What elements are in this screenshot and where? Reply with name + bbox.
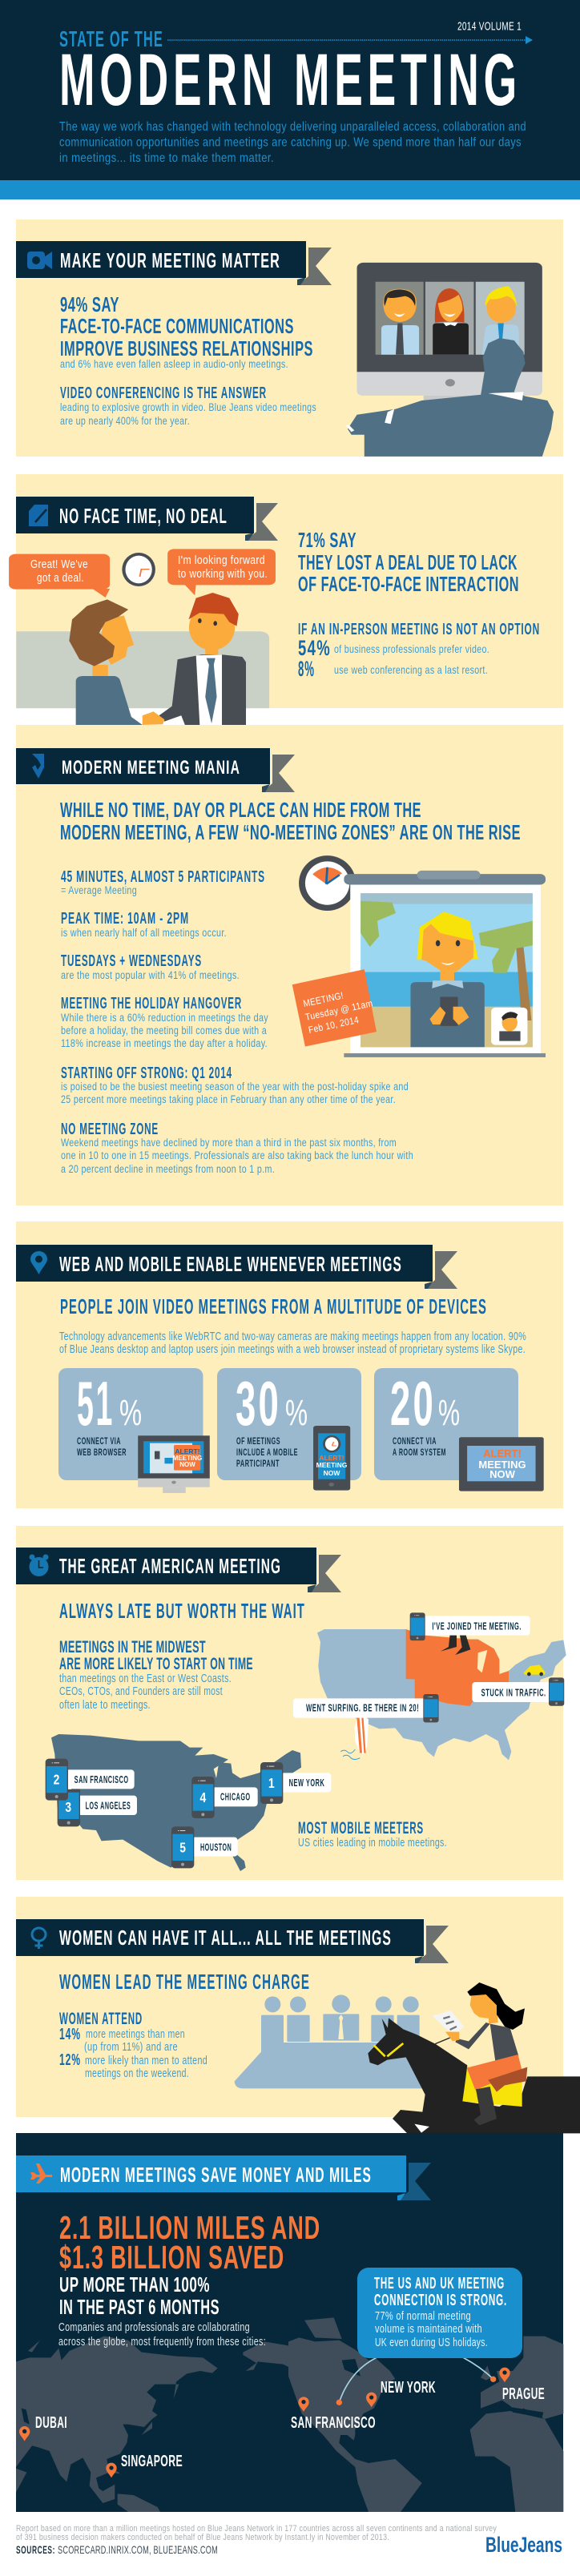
section banner bbox=[16, 1245, 457, 1289]
item: tuesdays and wednesdays: TUESDAYS + WEDNESDAYS bbox=[61, 952, 202, 970]
item: holiday hangover bbox=[61, 995, 268, 1049]
section banner bbox=[16, 497, 278, 541]
subheading bbox=[59, 1638, 253, 1673]
body text: are up nearly 400% for the year. bbox=[60, 414, 190, 427]
body text: CEOs, CTOs, and Founders are still most bbox=[59, 1684, 223, 1698]
item: tuesdays and wednesdays bbox=[61, 952, 240, 981]
headline figures: 2.1 BILLION MILES AND bbox=[59, 2209, 320, 2246]
item: no meeting zone: a 20 percent decline in meetings from noon to 1 p.m. bbox=[61, 1163, 275, 1175]
item: average meeting: 45 MINUTES, ALMOST 5 PARTICIPANTS bbox=[61, 868, 265, 886]
subheading bbox=[59, 2272, 220, 2319]
kicker: STATE OF THE bbox=[59, 26, 163, 51]
city: los angeles: 3 bbox=[65, 1801, 71, 1815]
section banner bbox=[16, 1548, 341, 1592]
stat: 14 percent: more meetings than men bbox=[86, 2028, 185, 2041]
panel: modern meeting mania bbox=[16, 725, 563, 1205]
sticky note text: Feb 10, 2014 bbox=[308, 1014, 360, 1036]
speech bubble text: man: to working with you. bbox=[178, 568, 268, 581]
panel: women bbox=[16, 1897, 580, 2133]
city labels: PRAGUE bbox=[502, 2385, 545, 2403]
callout: surfing bbox=[293, 1694, 439, 1722]
sources: SCORECARD.INRIX.COM, BLUEJEANS.COM bbox=[58, 2543, 218, 2556]
card: 30 percent: PARTICIPANT bbox=[236, 1458, 280, 1469]
heading: WOMEN LEAD THE MEETING CHARGE bbox=[59, 1970, 310, 1994]
item: average meeting bbox=[61, 868, 265, 896]
callout: traffic bbox=[472, 1677, 564, 1706]
most mobile meeters: MOST MOBILE MEETERS bbox=[298, 1819, 424, 1837]
item: average meeting: = Average Meeting bbox=[61, 884, 137, 896]
item: no meeting zone: one in 10 to one in 15 meetings. Professionals are also taking back the lunch hour with bbox=[61, 1149, 413, 1161]
card: 51 percent: % bbox=[119, 1392, 143, 1433]
icon: room system display: NOW bbox=[489, 1468, 516, 1480]
body text: Companies and professionals are collaborating bbox=[58, 2320, 250, 2334]
intro text bbox=[59, 1330, 526, 1356]
heading: ALWAYS LATE BUT WORTH THE WAIT bbox=[59, 1599, 305, 1623]
section banner bbox=[16, 241, 332, 285]
sticky note text: MEETING! bbox=[302, 990, 344, 1009]
icon: mobile phone: ALERT! bbox=[319, 1454, 344, 1462]
subheading: WOMEN ATTEND bbox=[59, 2010, 143, 2028]
speech bubble text: man: I'm looking forward bbox=[178, 554, 265, 567]
map: most mobile cities bbox=[46, 1734, 331, 1871]
subheading: IN THE PAST 6 MONTHS bbox=[59, 2295, 220, 2319]
icon: signed document bbox=[29, 505, 48, 526]
card: 51 percent bbox=[58, 1368, 203, 1480]
stat: 12 percent bbox=[59, 2051, 207, 2080]
speech bubble text: woman: got a deal. bbox=[37, 572, 84, 585]
panel: the great american meeting bbox=[16, 1526, 566, 1880]
city: chicago bbox=[191, 1777, 258, 1818]
icon: room system display: MEETING bbox=[478, 1459, 526, 1471]
headline figures: $1.3 BILLION SAVED bbox=[59, 2239, 284, 2276]
item: holiday hangover: before a holiday, the meeting bill comes due with a bbox=[61, 1024, 267, 1036]
panel: make your meeting matter bbox=[16, 219, 563, 457]
stat: 8 percent bbox=[298, 657, 488, 681]
intro text: in meetings... its time to make them matter. bbox=[59, 151, 274, 165]
item: holiday hangover: While there is a 60% reduction in meetings the day bbox=[61, 1012, 268, 1024]
panel: no face time, no deal bbox=[9, 474, 563, 725]
callout: us and uk bbox=[357, 2268, 522, 2358]
key stat: IMPROVE BUSINESS RELATIONSHIPS bbox=[60, 336, 313, 360]
illustration: video call on monitor bbox=[346, 263, 554, 457]
item: no meeting zone: Weekend meetings have declined by more than a third in the past six months, from bbox=[61, 1137, 397, 1149]
city: los angeles: LOS ANGELES bbox=[86, 1800, 131, 1811]
panel: save money and miles bbox=[16, 2133, 563, 2512]
body text bbox=[59, 1672, 232, 1712]
city: san francisco: SAN FRANCISCO bbox=[75, 1774, 129, 1785]
stat: 54 percent: of business professionals prefer video. bbox=[334, 642, 489, 655]
connection arcs bbox=[298, 2357, 510, 2412]
pins: asia bbox=[19, 2426, 117, 2477]
item: holiday hangover: MEETING THE HOLIDAY HANGOVER bbox=[61, 995, 242, 1012]
illustration: clock and projection screen bbox=[292, 855, 546, 1057]
stat: 12 percent: meetings on the weekend. bbox=[85, 2067, 189, 2080]
sticky note text: Tuesday @ 11am bbox=[304, 997, 374, 1023]
stat: 14 percent: 14% bbox=[59, 2026, 81, 2043]
city: new york: NEW YORK bbox=[289, 1777, 324, 1789]
key stat: 71% SAY bbox=[298, 528, 356, 552]
stat: 14 percent: (up from 11%) and are bbox=[84, 2041, 178, 2054]
card: 30 percent: % bbox=[285, 1392, 308, 1433]
callout: us and uk: volume is maintained with bbox=[375, 2322, 482, 2336]
illustration: meeting table and rider on horse bbox=[235, 1982, 580, 2133]
edition label: 2014 VOLUME 1 bbox=[457, 19, 522, 34]
icon: airplane bbox=[30, 2163, 52, 2184]
card: 20 percent: A ROOM SYSTEM bbox=[393, 1447, 446, 1458]
speech bubble text: woman bbox=[30, 558, 88, 585]
map: world, asia side bbox=[16, 2337, 296, 2512]
speech bubble text: woman: Great! We've bbox=[30, 558, 88, 571]
sources bbox=[16, 2543, 218, 2556]
body text: often late to meetings. bbox=[59, 1698, 151, 1712]
stat: 12 percent: more likely than men to attend bbox=[85, 2055, 207, 2067]
item: tuesdays and wednesdays: are the most popular with 41% of meetings. bbox=[61, 969, 240, 981]
subheading: MEETINGS IN THE MIDWEST bbox=[59, 1638, 206, 1656]
stat: 12 percent: 12% bbox=[59, 2051, 81, 2069]
card: 30 percent bbox=[217, 1368, 361, 1480]
stat note: and 6% have even fallen asleep in audio-only meetings. bbox=[60, 357, 288, 370]
card: 20 percent: % bbox=[438, 1392, 461, 1433]
illustration: handshake scene bbox=[9, 549, 276, 725]
key stat: FACE-TO-FACE COMMUNICATIONS bbox=[60, 314, 294, 338]
map: world, americas and europe side bbox=[288, 2317, 563, 2512]
card: 30 percent: 30 bbox=[236, 1368, 281, 1439]
body text: than meetings on the East or West Coasts. bbox=[59, 1672, 232, 1685]
item: starting off strong: is poised to be the busiest meeting season of the year with the post-holiday spike and bbox=[61, 1081, 409, 1093]
intro text bbox=[59, 120, 526, 165]
banner title: MODERN MEETINGS SAVE MONEY AND MILES bbox=[60, 2163, 372, 2187]
card: 51 percent: CONNECT VIA bbox=[77, 1435, 121, 1447]
icon: video camera bbox=[27, 252, 52, 269]
city labels bbox=[35, 2379, 545, 2470]
card: 51 percent: 51 bbox=[77, 1368, 115, 1439]
city: san francisco bbox=[46, 1759, 135, 1801]
icon: desktop computer: MEETING bbox=[173, 1455, 202, 1462]
most mobile meeters: US cities leading in mobile meetings. bbox=[298, 1836, 447, 1849]
most mobile meeters bbox=[298, 1819, 447, 1849]
card: 30 percent: OF MEETINGS bbox=[236, 1435, 280, 1447]
key stat bbox=[60, 292, 313, 360]
icon: mobile phone: NOW bbox=[324, 1469, 340, 1477]
callout: joined bbox=[410, 1612, 530, 1640]
body text bbox=[58, 2320, 266, 2349]
icon: mobile phone: MEETING bbox=[316, 1461, 348, 1469]
callout: us and uk: 77% of normal meeting bbox=[375, 2309, 471, 2323]
section banner bbox=[16, 748, 295, 792]
stat: 14 percent bbox=[59, 2026, 185, 2054]
item: peak time: PEAK TIME: 10AM - 2PM bbox=[61, 910, 189, 928]
city: chicago: 4 bbox=[199, 1791, 206, 1805]
item: peak time bbox=[61, 910, 227, 939]
icon: female symbol bbox=[32, 1928, 46, 1949]
key stat bbox=[298, 528, 519, 596]
item: starting off strong: 25 percent more meetings taking place in February than any other time of the year. bbox=[61, 1093, 396, 1105]
icon: nib bbox=[32, 754, 44, 779]
callout: us and uk: UK even during US holidays. bbox=[375, 2336, 488, 2349]
city: chicago: CHICAGO bbox=[220, 1792, 251, 1803]
item: peak time: is when nearly half of all meetings occur. bbox=[61, 927, 227, 939]
city labels: SINGAPORE bbox=[121, 2453, 183, 2470]
callout: surfing: WENT SURFING. BE THERE IN 20! bbox=[306, 1703, 419, 1714]
key stat: 94% SAY bbox=[60, 292, 119, 316]
icon: room system display: ALERT! bbox=[483, 1447, 522, 1459]
subheading: VIDEO CONFERENCING IS THE ANSWER bbox=[60, 384, 267, 402]
city labels: SAN FRANCISCO bbox=[291, 2414, 376, 2432]
banner title: MAKE YOUR MEETING MATTER bbox=[60, 248, 280, 272]
city: houston: HOUSTON bbox=[200, 1842, 232, 1854]
banner title: MODERN MEETING MANIA bbox=[62, 757, 240, 779]
stat: 54 percent: 54% bbox=[298, 636, 331, 660]
icon: desktop computer: ALERT! bbox=[175, 1447, 200, 1455]
panel: web and mobile bbox=[16, 1222, 563, 1508]
icon: desktop computer: NOW bbox=[179, 1461, 195, 1468]
icon: location pin bbox=[30, 1251, 47, 1274]
card: 20 percent: CONNECT VIA bbox=[393, 1435, 437, 1447]
city: new york bbox=[260, 1762, 331, 1804]
icon: room system display bbox=[459, 1437, 544, 1491]
city: san francisco: 2 bbox=[54, 1773, 60, 1788]
city: los angeles bbox=[58, 1785, 137, 1826]
item: starting off strong: STARTING OFF STRONG: Q1 2014 bbox=[61, 1065, 232, 1082]
methodology note: of 391 business decision makers conducted on behalf of Blue Jeans Network by Instant.ly in November of 2013. bbox=[16, 2533, 389, 2542]
item: no meeting zone bbox=[61, 1121, 413, 1175]
methodology note bbox=[16, 2524, 497, 2542]
body text: leading to explosive growth in video. Blue Jeans video meetings bbox=[60, 400, 316, 413]
speech bubble text: man bbox=[178, 554, 268, 581]
sources: SOURCES: bbox=[16, 2543, 55, 2556]
subheading: UP MORE THAN 100% bbox=[59, 2272, 210, 2296]
banner title: THE GREAT AMERICAN MEETING bbox=[59, 1554, 281, 1578]
header bbox=[0, 0, 580, 199]
sticky note text bbox=[302, 990, 374, 1036]
section banner bbox=[16, 2155, 431, 2200]
icon: mobile phone bbox=[313, 1426, 350, 1491]
city labels: DUBAI bbox=[35, 2414, 67, 2432]
icon: alarm clock bbox=[29, 1554, 48, 1576]
section banner bbox=[16, 1919, 449, 1963]
banner title: NO FACE TIME, NO DEAL bbox=[59, 504, 228, 528]
footer bbox=[16, 2524, 562, 2557]
card: 20 percent bbox=[374, 1368, 518, 1480]
headline figures bbox=[59, 2209, 320, 2276]
subheading: ARE MORE LIKELY TO START ON TIME bbox=[59, 1655, 253, 1673]
heading bbox=[60, 798, 521, 844]
body text bbox=[60, 400, 316, 427]
stat: 8 percent: use web conferencing as a last resort. bbox=[334, 663, 488, 676]
card: 30 percent: INCLUDE A MOBILE bbox=[236, 1447, 298, 1458]
item: holiday hangover: 118% increase in meetings the day after a holiday. bbox=[61, 1037, 268, 1049]
city: new york: 1 bbox=[268, 1777, 275, 1791]
city: houston bbox=[171, 1826, 238, 1868]
icon: desktop computer bbox=[138, 1435, 210, 1493]
map: midwest on time bbox=[293, 1612, 566, 1760]
card: 20 percent: 20 bbox=[390, 1368, 436, 1439]
callout: joined: I'VE JOINED THE MEETING. bbox=[432, 1620, 522, 1632]
city labels: NEW YORK bbox=[381, 2379, 436, 2397]
item: no meeting zone: NO MEETING ZONE bbox=[61, 1121, 159, 1138]
arrow bbox=[167, 36, 533, 44]
city: houston: 5 bbox=[179, 1841, 186, 1856]
item: starting off strong bbox=[61, 1065, 409, 1105]
stat: 54 percent bbox=[298, 636, 489, 660]
stat: 8 percent: 8% bbox=[298, 657, 315, 681]
card: 51 percent: WEB BROWSER bbox=[77, 1447, 127, 1458]
body text: across the globe, most frequently from these cities: bbox=[58, 2335, 266, 2349]
